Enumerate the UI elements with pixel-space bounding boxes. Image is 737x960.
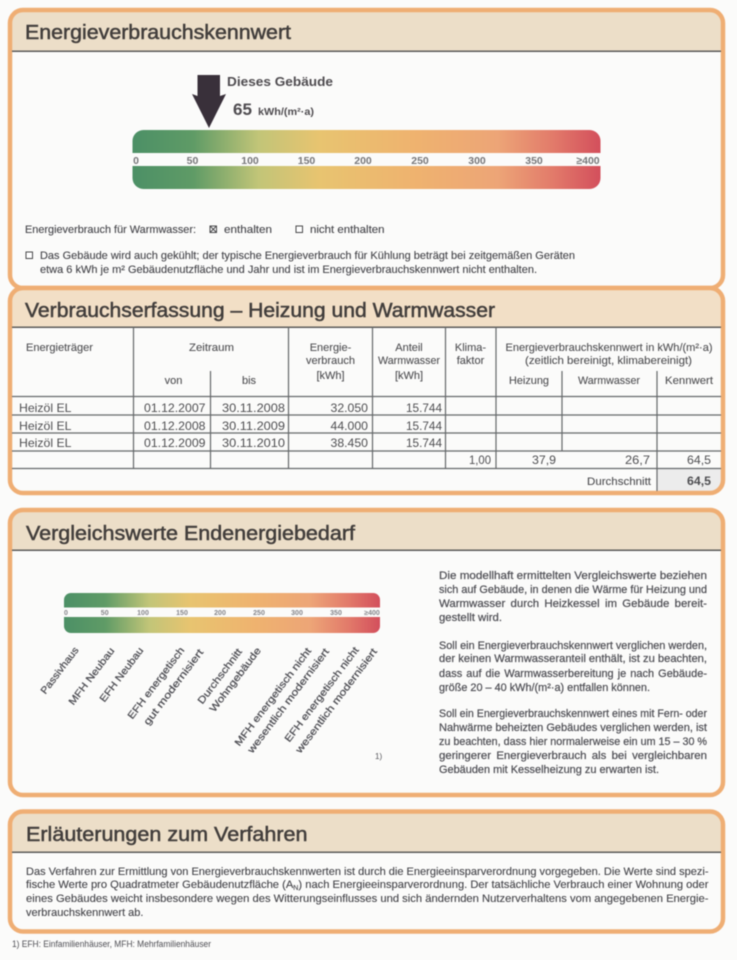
procedure text: fische Werte pro Quadratmeter Gebäudenutzfläche (A [26,879,289,891]
table rows: 15.744 [406,401,442,415]
table header: Energieverbrauchskennwert in kWh/(m²·a) [506,342,712,354]
cooling note [26,250,575,276]
building value: kWh/(m²·a) [258,107,314,118]
comparison scale bar: 350 [330,610,342,617]
rotated building type labels: Wohngebäude [208,645,264,715]
scale bar: 350 [525,155,543,167]
table rows: Heizöl EL [19,419,72,433]
rotated building type labels: MFH energetisch nicht [233,646,314,749]
cooling note: Das Gebäude wird auch gekühlt; der typische Energieverbrauch für Kühlung beträgt bei zeitgemäßen Geräten [40,250,575,262]
cooling note: etwa 6 kWh je m² Gebäudenutzfläche und Jahr und ist im Energieverbrauchskennwert nicht enthalten. [40,264,537,276]
panel: Erläuterungen zum Verfahren [10,812,723,932]
explanatory text [439,570,707,776]
hot water line [25,224,384,236]
comparison scale bar: 300 [291,610,303,617]
heading: Vergleichswerte Endenergiebedarf [26,523,355,545]
explanatory text: Nahwärme beheizten Gebäudes verglichen werden, ist [439,722,707,734]
rotated building type labels: EFH Neubau [98,646,146,705]
table rows: 38.450 [330,436,368,450]
building label: Dieses Gebäude [227,74,333,89]
explanatory text: gestellt wird. [439,612,502,624]
building value [233,100,314,119]
table header: (zeitlich bereinigt, klimabereinigt) [525,355,692,367]
table [12,326,721,491]
table rows: 37,9 [532,453,556,467]
explanatory text: Soll ein Energieverbrauchskennwert eines mit Fern- oder [439,708,707,720]
scale bar: 250 [411,155,429,167]
procedure text: Das Verfahren zur Ermittlung von Energieverbrauchskennwerten ist durch die Energieeinsparverordnung vorgegeben. Die Werte sind spezi- [26,866,709,878]
comparison scale bar: 250 [253,610,265,617]
table header: Energie- [310,342,352,354]
procedure text: eines Gebäudes weicht insbesondere wegen des Witterungseinflusses und sich ändernden Nutzerverhaltens vom angegebenen Energie- [26,893,709,905]
table header: [kWh] [316,370,345,382]
table rows: 64,5 [687,453,711,467]
scale bar: 100 [241,155,259,167]
table rows [19,401,711,467]
procedure text: verbrauchskennwert ab. [26,907,144,919]
comparison scale bar: 200 [214,610,226,617]
table header: bis [242,375,257,387]
panel: Vergleichswerte Endenergiebedarf [10,510,723,795]
table rows: 32.050 [330,401,368,415]
rotated building type labels: Durchschnitt [196,647,245,707]
procedure text: ) [298,879,302,891]
table rows: 01.12.2009 [144,436,206,450]
table rows: 30.11.2008 [222,401,285,415]
scale bar: 150 [298,155,315,167]
table rows: Heizöl EL [19,436,72,450]
comparison scale bar [64,593,380,633]
rotated building type labels: Passivhaus [39,645,81,697]
table header: Warmwasser [378,355,440,367]
panel: Energieverbrauchskennwert [10,10,723,288]
rotated building type labels: EFH energetisch [126,646,187,722]
explanatory text: Warmwasser durch Heizkessel im Gebäude bereit- [439,598,707,610]
table header: [kWh] [395,370,423,382]
table header: Warmwasser [578,375,640,387]
heading: Energieverbrauchskennwert [25,22,291,44]
procedure text: N [293,885,298,892]
table header: Kennwert [665,375,713,387]
rotated building type labels: gut modernisiert [142,647,206,728]
table rows: 30.11.2009 [222,419,285,433]
hot water line: nicht enthalten [310,224,384,236]
icon: arrow marking this building [192,75,226,128]
explanatory text: zu beachten, dass hier normalerweise ein um 15 – 30 % [439,736,707,748]
table rows: 26,7 [625,453,650,467]
scale bar: 300 [468,155,486,167]
table header: faktor [457,355,485,367]
panel: Verbrauchserfassung [10,288,723,493]
explanatory text: Die modellhaft ermittelten Vergleichswerte beziehen [439,570,707,582]
comparison scale bar: ≥400 [364,610,380,617]
heading: Verbrauchserfassung – Heizung und Warmwasser [25,300,495,322]
table header: Heizung [509,375,549,387]
scale bar: 50 [187,155,198,167]
table header: verbrauch [306,355,355,367]
comparison scale bar: 0 [64,610,68,617]
rotated building type labels: wesentlich modernisiert [293,647,380,757]
average row: Durchschnitt [587,476,651,488]
scale bar: 0 [133,155,139,167]
table header: Zeitraum [189,342,234,354]
explanatory text: geringerer Energieverbrauch als bei vergleichbaren [439,750,707,762]
explanatory text: sich auf Gebäude, in denen die Wärme für Heizung und [439,584,707,596]
table rows: 44.000 [330,419,368,433]
comparison scale bar: 50 [101,610,109,617]
table rows: 01.12.2008 [144,419,206,433]
table rows: 15.744 [406,436,442,450]
heading: Erläuterungen zum Verfahren [26,824,308,846]
table rows: 01.12.2007 [144,401,206,415]
explanatory text: Gebäuden mit Kesselheizung zu erwarten ist. [439,764,659,776]
average row [587,474,711,488]
comparison scale bar: 150 [176,610,188,617]
explanatory text: dass auf die Warmwasserbereitung je nach Gebäude- [439,668,707,680]
table header [26,342,713,387]
table rows: 15.744 [406,419,442,433]
scale bar [132,130,600,189]
building value: 65 [233,100,252,119]
explanatory text: größe 20 – 40 kWh/(m²·a) entfallen können. [439,682,650,694]
scale bar: ≥400 [576,155,600,167]
table rows: 30.11.2010 [222,436,285,450]
footnote marker: 1) [375,752,382,761]
table header: Energieträger [26,342,93,354]
rotated building type labels: MFH Neubau [67,646,117,708]
table rows: 1,00 [469,453,491,467]
rotated building type labels: wesentlich modernisiert [245,647,332,757]
footnote: 1) EFH: Einfamilienhäuser, MFH: Mehrfamilienhäuser [12,939,211,949]
rotated building type labels [39,645,380,757]
rotated building type labels: EFH energetisch nicht [283,645,362,745]
hot water line: enthalten [224,224,272,236]
procedure text: nach Energieeinsparverordnung. Der tatsächliche Verbrauch einer Wohnung oder [305,879,702,891]
procedure text [26,866,709,919]
comparison scale bar: 100 [137,610,149,617]
table header: Klima- [455,342,486,354]
explanatory text: der keinen Warmwasseranteil enthält, ist zu beachten, [439,653,707,665]
table header: von [165,375,182,387]
average row: 64,5 [687,474,711,488]
table header: Anteil [395,342,423,354]
hot water line: Energieverbrauch für Warmwasser: [25,224,196,236]
table rows: Heizöl EL [19,401,72,415]
scale bar: 200 [354,155,372,167]
explanatory text: Soll ein Energieverbrauchskennwert verglichen werden, [439,640,707,652]
